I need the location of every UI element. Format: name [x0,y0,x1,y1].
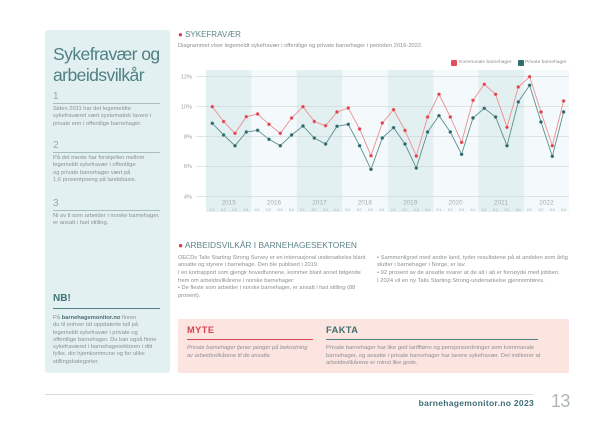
line chart: K1 [482,207,488,212]
NB text: sykefraværet i barnehagesektoren i ditt [53,344,152,350]
NB text: du til enhver tid oppdaterte tall på [53,322,138,328]
fakta: barnehager, og ansatte i private barnehager har lavere sykefravær. Det indikerer at [326,352,540,358]
point 2: og private barnehager vært på [53,170,130,176]
line chart: 2021 [494,200,509,207]
point 1 [53,91,160,127]
line chart: K3 [550,207,556,212]
fakta: Private barnehager har like god tarifflønn og pensjonsordninger som kommunale [326,345,534,351]
line chart: 2017 [312,200,327,207]
line chart: K2 [312,207,317,212]
line chart: K4 [471,207,476,212]
line chart: K2 [221,207,227,212]
NB text: legemeldt sykefravær i private og [53,330,138,336]
page number: 13 [551,391,570,411]
line chart: 2020 [448,200,463,207]
NB text [53,314,156,365]
NB note [53,293,160,365]
line chart: K3 [459,207,465,212]
line chart: K1 [437,207,442,212]
point 2: På det meste har forskjellen mellom [53,155,144,161]
line chart: K1 [255,207,261,212]
line chart: K4 [516,207,522,212]
point 1: Siden 2011 har det legemeldte [53,106,131,112]
intro text: Diagrammet viser legemeldt sykefravær i offentlige og private barnehager i perioden 2016-2022. [178,43,423,49]
text column left: prosent). [178,293,200,299]
point 3: er ansatt i fast stilling. [53,220,108,226]
title: arbeidsvilkår [53,65,144,85]
text column left: • De fleste som arbeider i norske barnehager, er ansatt i fast stilling (88 [178,285,355,291]
line chart: K2 [403,207,408,212]
line chart: 8% [184,135,192,141]
NB text: offentlige barnehager. Du kan også finne [53,337,156,343]
NB text: fylke, din hjemkommune og for ulike [53,351,145,357]
fakta [326,325,540,366]
heading: sykefravær: ● SYKEFRAVÆR [178,30,241,39]
line chart: K4 [380,207,385,212]
point 2: legemeldt sykefravær i offentlige [53,162,136,168]
fakta: FAKTA [326,325,358,335]
line chart: K2 [448,207,454,212]
line chart: 2022 [539,200,554,207]
point 1: sykefraværet vært systematisk lavere i [53,113,151,119]
title [53,44,160,85]
point 3 [53,198,160,226]
fakta: arbeidsvilkårene er minst like gode. [326,360,418,366]
line chart: K3 [323,207,329,212]
text column right [377,254,568,284]
legend: Kommunale barnehager [459,60,511,65]
line chart: 2019 [403,200,418,207]
point 3: 3 [53,198,59,209]
footer text: barnehagemonitor.no 2023 [419,398,534,408]
point 2 [53,140,160,183]
point 1: 1 [53,91,59,102]
line chart: 6% [184,164,192,170]
title: Sykefravær og [53,44,160,64]
text column left: I en kortrapport som gjengir hovedfunnene, kommer blant annet følgende [178,270,361,276]
line chart: 2018 [358,200,372,207]
line chart: K1 [210,207,215,212]
point 3: Ni av ti som arbeider i norske barnehager, [53,213,160,219]
line chart: 12% [181,75,192,81]
text column left: ansatte og styrere i barnehage. Den ble publisert i 2019. [178,262,318,268]
line chart: K4 [244,207,249,212]
heading: arbeidsvilkår: ● ARBEIDSVILKÅR I BARNEHAGESEKTOREN [178,240,357,250]
line chart: K2 [493,207,499,212]
line chart: K2 [357,207,363,212]
line chart: K1 [300,207,306,212]
line chart: K2 [266,207,272,212]
line chart: K1 [391,207,397,212]
line chart: K2 [539,207,544,212]
line chart: 10% [181,105,192,111]
NB text: stillingskategorier. [53,359,99,365]
line chart: K1 [527,207,533,212]
point 2: 1,6 prosentpoeng på landsbasis. [53,177,136,183]
line chart: 2016 [267,200,282,207]
legend: Private barnehager [525,60,567,65]
line chart: 2015 [222,200,236,207]
point 2: 2 [53,140,59,151]
panel: myte og fakta [178,319,569,373]
line chart: K4 [289,207,295,212]
legend [451,60,567,66]
footer rule [45,394,533,395]
point 1: private enn i offentlige barnehager. [53,121,141,127]
line chart: K1 [346,207,351,212]
text column left: frem om arbeidsvilkårene i norske barnehager: [178,278,295,284]
line chart: 4% [184,195,192,201]
line chart: K3 [414,207,420,212]
panel: left sidebar [45,30,170,373]
myte: av arbeidsvilkårene til de ansatte. [187,352,271,358]
line chart: K3 [505,207,510,212]
myte [187,325,313,358]
text column right: • Sammenlignet med andre land, tyder resultatene på at andelen som årlig [377,254,568,260]
NB text: På barnehagemonitor.no finner [53,315,136,321]
text column right: • 92 prosent av de ansatte svarer at de alt i alt er fornøyde med jobben. [377,270,560,276]
line chart: K4 [561,207,567,212]
NB heading: NB! [53,293,71,304]
line chart: K4 [334,207,340,212]
text column left [178,254,366,299]
line chart: K3 [232,207,238,212]
text column right: slutter i barnehager i Norge, er lav. [377,262,466,268]
text column right: I 2024 vil en ny Talis Starting Strong-undersøkelse gjennomføres. [377,278,545,284]
myte: MYTE [187,325,215,335]
line chart: K4 [425,207,431,212]
text column left: OECDs Talis Starting Strong Survey er en internasjonal undersøkelse blant [178,254,365,260]
line chart: K3 [278,207,283,212]
myte: Private barnehager tjener penger på bekostning [187,345,307,351]
line chart: K3 [368,207,374,212]
